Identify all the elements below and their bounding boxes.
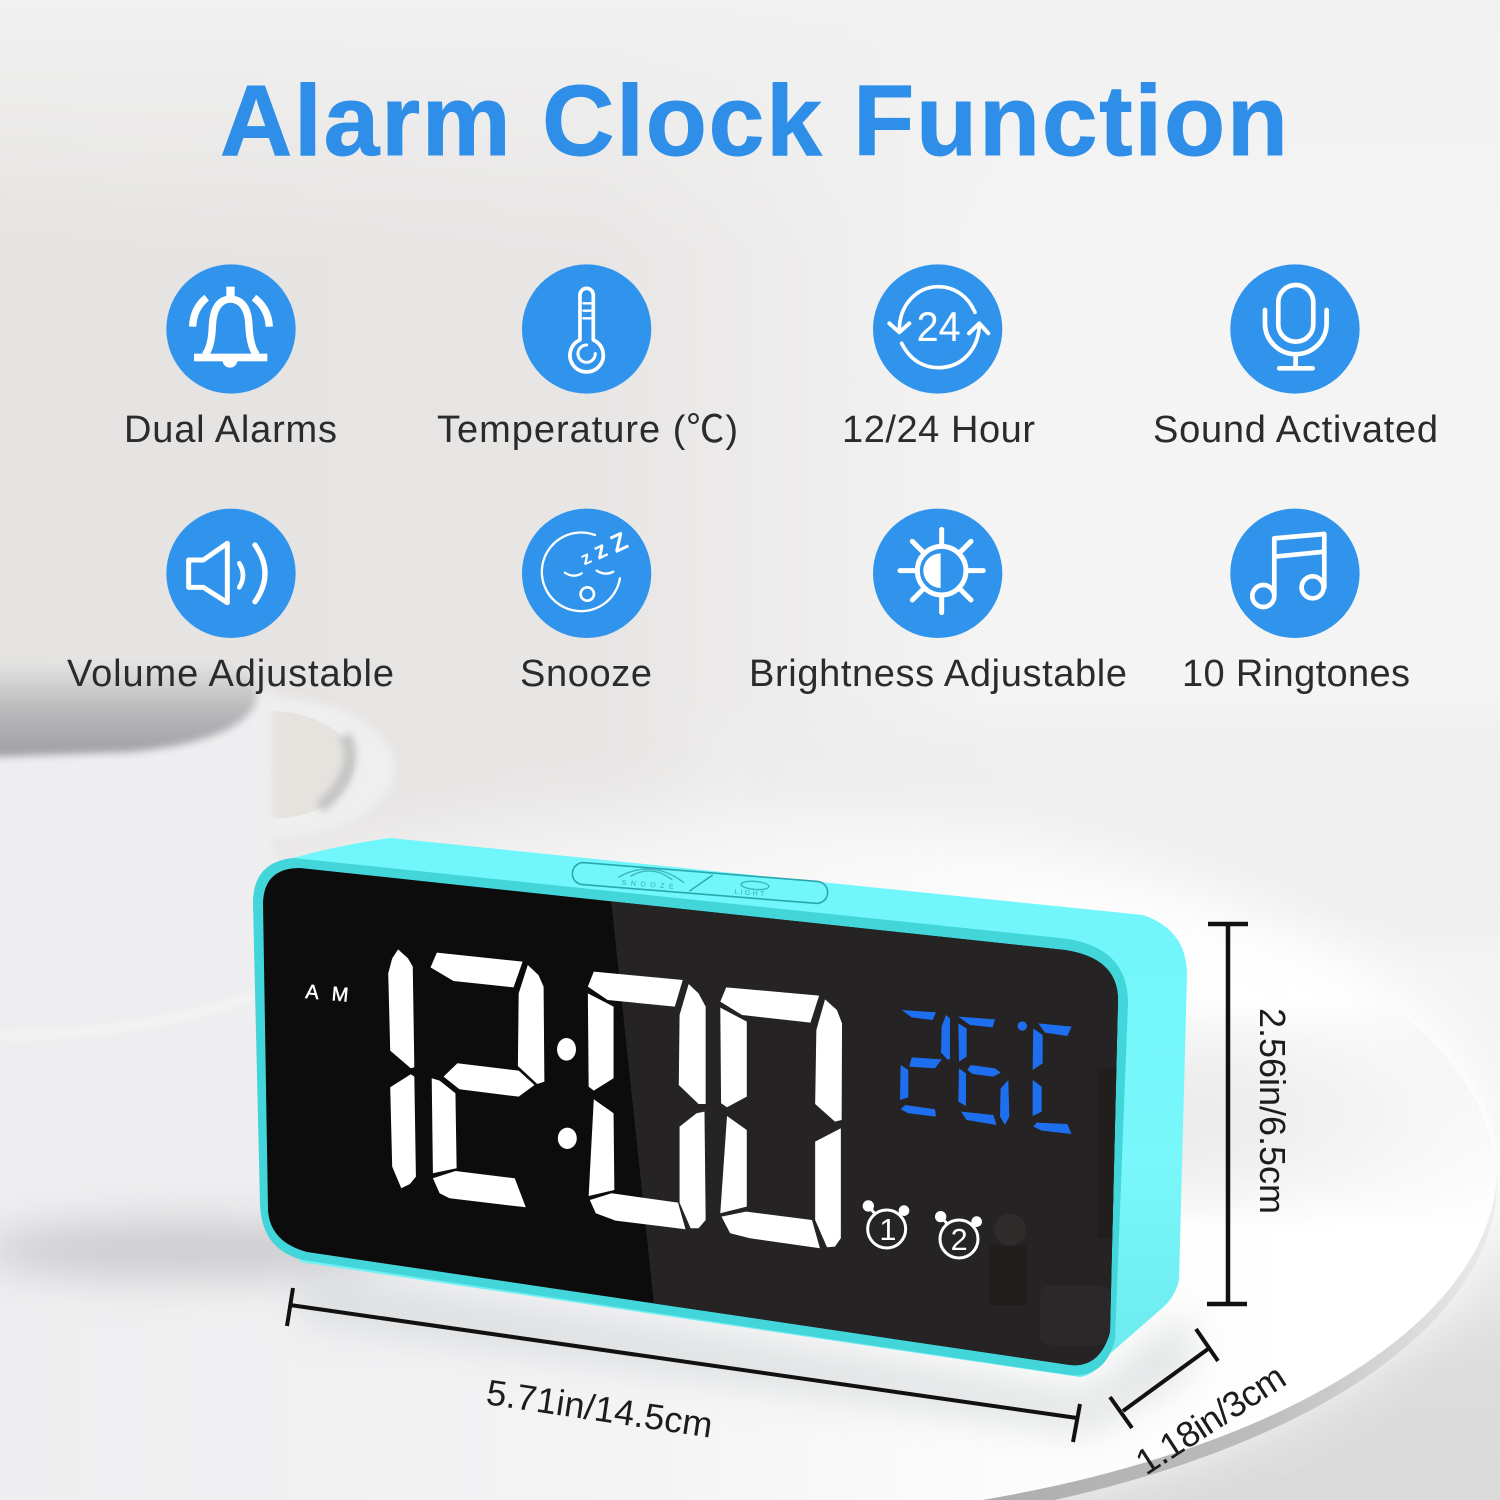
dimension: width: 5.71in/14.5cm <box>484 1371 715 1446</box>
label: 12/24 hour: 12/24 Hour <box>842 409 1035 451</box>
alarm indicator 2: 2 <box>951 1223 968 1257</box>
dimension: width <box>287 1288 1080 1446</box>
label: volume adjustable: Volume Adjustable <box>67 653 394 695</box>
front bezel <box>253 858 1128 1375</box>
icon: snooze face <box>522 509 651 638</box>
icon: 12/24 hour: 24 <box>917 303 961 350</box>
icon: brightness sun <box>873 509 1002 638</box>
mirror screen <box>250 860 1130 1380</box>
label: sound activated: Sound Activated <box>1153 409 1438 451</box>
dimension: height <box>1207 924 1293 1304</box>
clock body <box>293 838 1187 1377</box>
label: brightness adjustable: Brightness Adjustable <box>749 653 1127 695</box>
alarm indicator 1: 1 <box>879 1213 896 1247</box>
icon: microphone <box>1230 264 1360 394</box>
icon: thermometer <box>522 264 651 394</box>
alarm clock <box>250 838 1187 1380</box>
dimension: height: 2.56in/6.5cm <box>1252 1008 1293 1214</box>
icon: dual alarms bell <box>166 264 296 394</box>
top buttons: SNOOZE <box>621 880 674 891</box>
icon: 12/24 hour <box>873 264 1002 394</box>
time digits 12:00 <box>388 949 842 1248</box>
label: temperature: Temperature (℃) <box>437 409 738 451</box>
AM indicator: AM <box>305 981 349 1007</box>
alarm indicator 1 <box>863 1200 909 1248</box>
dimension: depth: 1.18in/3cm <box>1128 1356 1293 1483</box>
alarm indicator 2 <box>935 1211 982 1258</box>
icon: music note <box>1230 509 1360 638</box>
label: dual alarms: Dual Alarms <box>124 409 337 451</box>
icon: snooze face: z <box>589 536 612 565</box>
icon: snooze face: Z <box>606 527 632 559</box>
temperature digits 26C <box>900 1010 1072 1134</box>
clock shadow on table <box>300 1275 1190 1430</box>
icon: speaker volume <box>166 509 296 638</box>
label: 10 ringtones: 10 Ringtones <box>1182 653 1410 695</box>
title: Alarm Clock Function <box>220 65 1288 177</box>
label: snooze: Snooze <box>520 653 652 695</box>
icon: snooze face: z <box>577 546 594 569</box>
top buttons <box>572 862 828 904</box>
top buttons: LIGHT <box>734 889 765 898</box>
coffee cup <box>0 662 400 1280</box>
